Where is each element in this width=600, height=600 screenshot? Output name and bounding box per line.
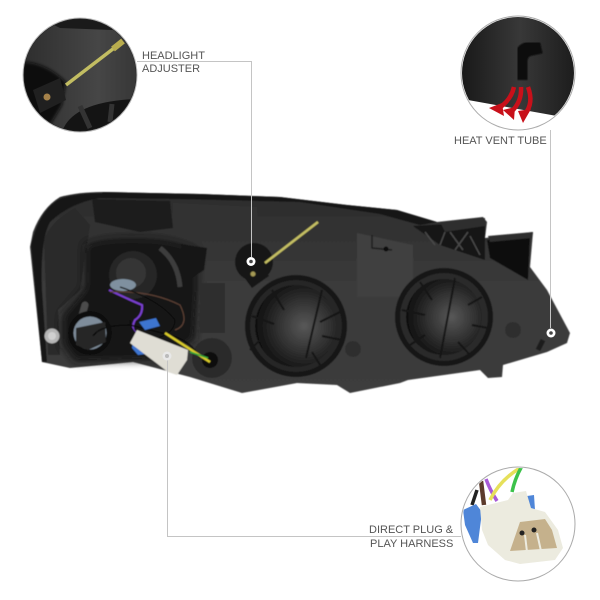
top inner panel	[92, 199, 173, 232]
vent tube elbow	[520, 46, 541, 80]
adjuster rod	[265, 222, 318, 263]
left side surface	[44, 208, 90, 355]
headlight housing	[30, 192, 570, 393]
connector body	[480, 491, 563, 564]
coloured wires	[472, 466, 522, 505]
adjuster rod	[65, 48, 114, 86]
marker dot: adjuster	[246, 257, 256, 266]
right centre panel	[357, 233, 413, 297]
housing surface	[24, 18, 138, 132]
rib section	[413, 218, 533, 280]
marker dot: vent	[546, 328, 556, 338]
harness grommet	[192, 338, 232, 378]
wiring harness	[93, 287, 210, 362]
detail circle: headlight adjuster	[22, 18, 140, 135]
housing body	[30, 192, 570, 393]
adjuster dark recess	[235, 243, 273, 281]
detail circle: heat vent tube	[460, 10, 580, 130]
connector opening	[510, 519, 557, 551]
top rim	[100, 192, 437, 225]
grey vertical panel	[200, 283, 225, 333]
callout line: heat vent tube	[550, 130, 552, 328]
white connector	[130, 330, 188, 375]
black housing	[462, 17, 574, 116]
left reflector bowl	[245, 275, 347, 377]
silver mounting bolt	[44, 328, 60, 344]
label: headlight adjuster: HEADLIGHT	[142, 50, 205, 62]
small mounting nub	[181, 244, 207, 278]
label: direct plug: DIRECT PLUG &	[369, 524, 454, 536]
callout line: harness	[168, 360, 461, 536]
right reflector bowl	[395, 268, 493, 366]
left dark edge	[31, 193, 103, 362]
mounting tabs	[345, 341, 361, 357]
callout line: headlight adjuster	[137, 62, 252, 257]
blue clip	[463, 495, 535, 543]
label: play harness: PLAY HARNESS	[370, 538, 453, 550]
marker dot: harness	[162, 352, 172, 360]
blue connector clips	[132, 318, 160, 355]
label: adjuster second line: ADJUSTER	[142, 63, 200, 75]
high bulb socket	[109, 248, 180, 299]
detail circle: plug and play harness	[461, 466, 575, 581]
fog bulb socket	[68, 305, 112, 355]
reflector cavity	[62, 238, 198, 362]
red arrows	[499, 87, 530, 114]
adjuster block	[33, 78, 66, 113]
adjuster mount	[238, 257, 269, 288]
label: heat vent tube: HEAT VENT TUBE	[454, 135, 547, 147]
